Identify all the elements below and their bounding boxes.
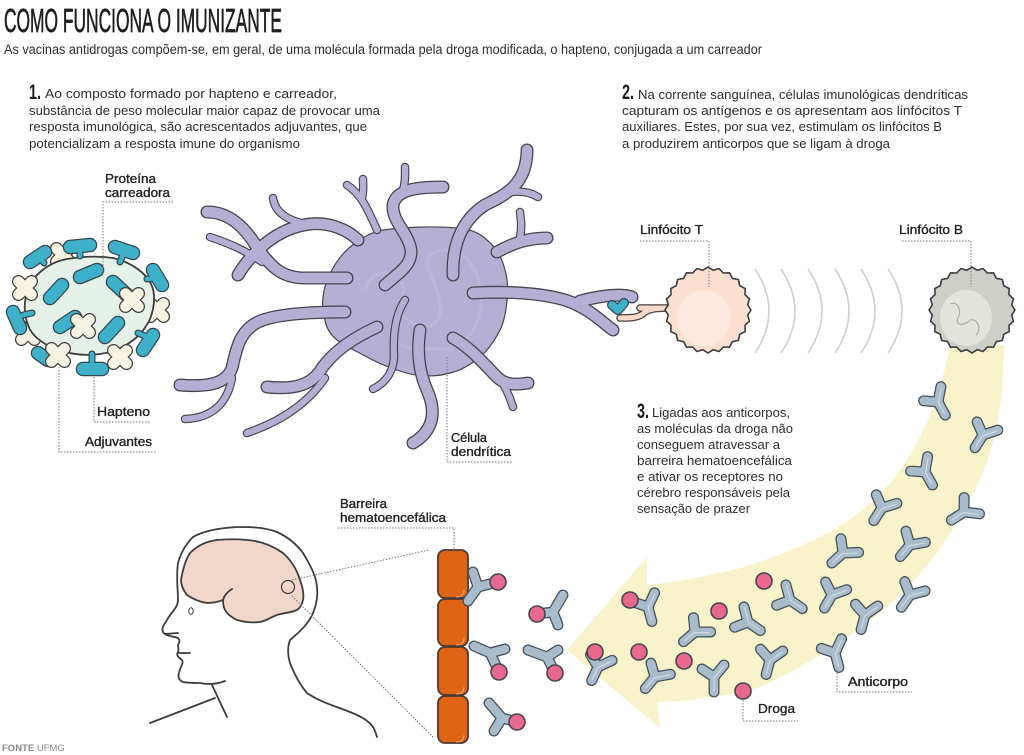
- brain: [181, 539, 303, 622]
- label: hapteno: Hapteno: [97, 405, 150, 419]
- text block: step 1: potencializam a resposta imune do organismo: [29, 137, 300, 151]
- text block: step 2: 2.: [622, 81, 634, 104]
- label: droga: Droga: [758, 702, 795, 716]
- text block: step 2: Na corrente sanguínea, células imunológicas dendríticas: [638, 88, 968, 102]
- label: adjuvantes: Adjuvantes: [85, 435, 152, 449]
- text block: step 1: [29, 81, 380, 151]
- title: COMO FUNCIONA O IMUNIZANTE: [4, 2, 282, 39]
- text block: step 1: resposta imunológica, são acrescentados adjuvantes, que: [29, 120, 367, 134]
- label: adjuvantes: [59, 367, 157, 452]
- label: proteína carreadora: [103, 172, 173, 272]
- text block: step 3: 3.: [637, 400, 649, 423]
- drug molecules: [587, 573, 772, 699]
- antibodies on arrow: [581, 387, 998, 695]
- label: hapteno: [94, 377, 150, 422]
- label: célula dendrítica: [447, 357, 513, 462]
- label: proteína carreadora: carreadora: [105, 186, 170, 200]
- lymphocyte B: [929, 267, 1015, 353]
- label: anticorpo: Anticorpo: [848, 675, 908, 689]
- text block: step 3: as moléculas da droga não: [637, 422, 793, 436]
- zoom lines to barrier: [292, 550, 433, 737]
- text block: step 2: auxiliares. Estes, por sua vez, estimulam os linfócitos B: [622, 120, 942, 134]
- label: barreira hematoencefálica: hematoencefálica: [340, 511, 446, 525]
- text block: step 1: Ao composto formado por hapteno e carreador,: [45, 87, 337, 101]
- dendritic cell: [180, 150, 632, 443]
- subtitle: As vacinas antidrogas compõem-se, em geral, de uma molécula formada pela droga modificada, o hapteno, conjugada a um carreador: [4, 42, 762, 57]
- label: célula dendrítica: Célula: [451, 431, 487, 445]
- label: proteína carreadora: Proteína: [105, 172, 156, 186]
- label: linfócito B: [899, 223, 971, 287]
- label: barreira hematoencefálica: Barreira: [340, 497, 387, 511]
- label: célula dendrítica: dendrítica: [451, 445, 511, 459]
- text block: step 3: barreira hematoencefálica: [637, 454, 792, 468]
- hapten on dendritic fingers: [612, 303, 624, 310]
- haptens: [13, 245, 162, 369]
- label: linfócito T: [640, 223, 709, 287]
- carrier protein illustration: [13, 245, 164, 369]
- text block: step 3: conseguem atravessar a: [637, 438, 780, 452]
- label: linfócito T: Linfócito T: [640, 223, 703, 237]
- head profile: [150, 527, 377, 737]
- nucleus folds: [365, 250, 481, 350]
- text block: step 2: [622, 81, 968, 151]
- label: droga: [743, 700, 798, 721]
- text block: step 1: 1.: [29, 81, 41, 104]
- adjuvants: [18, 282, 138, 364]
- text block: step 3: cérebro responsáveis pela: [637, 486, 790, 500]
- curved yellow arrow: [567, 345, 1004, 728]
- dendrite fills: [180, 150, 632, 443]
- text block: step 1: substância de peso molecular maior capaz de provocar uma: [29, 104, 380, 118]
- label: linfócito B: Linfócito B: [899, 223, 963, 237]
- text block: step 2: a produzirem anticorpos que se ligam à droga: [622, 137, 890, 151]
- text block: step 2: capturam os antígenos e os apresentam aos linfócitos T: [622, 104, 962, 118]
- label: anticorpo: [837, 670, 912, 692]
- lymphocyte T: [620, 267, 751, 353]
- text block: step 3: [637, 400, 793, 516]
- source: FONTE UFMG: [2, 743, 65, 754]
- antibodies bound to drug at barrier: [468, 572, 563, 731]
- text block: step 3: sensação de prazer: [637, 502, 750, 516]
- text block: step 3: Ligadas aos anticorpos,: [652, 406, 790, 420]
- blood-brain barrier: [438, 550, 468, 743]
- dendrite outlines: [180, 150, 632, 443]
- text block: step 3: e ativar os receptores no: [637, 470, 783, 484]
- signal waves: [755, 269, 902, 353]
- label: barreira hematoencefálica: [338, 497, 454, 550]
